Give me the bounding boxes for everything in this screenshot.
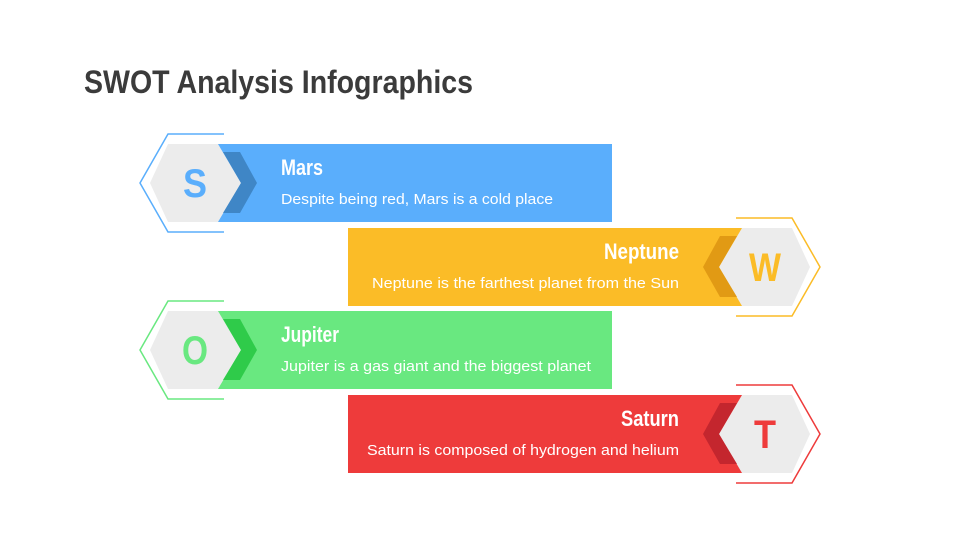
row: S Mars: S [183, 162, 207, 206]
row: O Jupiter: Jupiter [281, 322, 339, 347]
row: W Neptune: Neptune [604, 239, 679, 264]
row: W Neptune [348, 218, 820, 316]
row: T Saturn: Saturn [621, 406, 679, 431]
row: S Mars: Despite being red, Mars is a cold place [281, 191, 553, 208]
row: T Saturn: Saturn is composed of hydrogen and helium [367, 442, 679, 459]
row: S Mars: Mars [281, 155, 323, 180]
row: W Neptune: Neptune is the farthest planet from the Sun [372, 275, 679, 292]
row: O Jupiter [140, 301, 612, 399]
row: O Jupiter: O [182, 329, 208, 373]
row: S Mars [140, 134, 612, 232]
row: T Saturn: T [754, 413, 776, 457]
row: T Saturn [348, 385, 820, 483]
row: W Neptune: W [749, 246, 781, 290]
row: O Jupiter: Jupiter is a gas giant and the biggest planet [281, 358, 592, 375]
title: SWOT Analysis Infographics [84, 64, 473, 100]
